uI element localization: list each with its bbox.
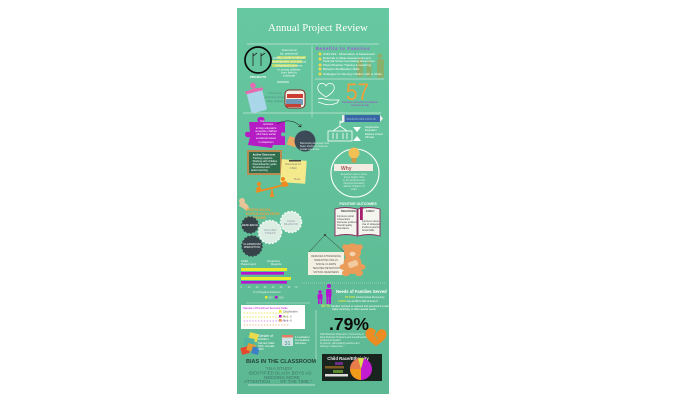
puzzle text: services [263, 122, 274, 126]
projects description: a decade [283, 74, 295, 78]
statistic description: Child Behavior Referrals in Community of [320, 333, 364, 336]
gears [242, 212, 302, 256]
big statistic .79%: .79% [329, 314, 369, 334]
panel: needs of families served [318, 284, 394, 311]
hanging sign: SCHOOL READINESS [313, 271, 339, 274]
chalkboard: Incline Classroom [253, 152, 276, 156]
gears: BEHAVIOR [284, 222, 298, 226]
lactation caption: Consultant [295, 338, 310, 342]
open book: Improves social [337, 215, 354, 218]
quote: ATTENTION OF THE TIME." [244, 379, 312, 384]
background panel [237, 8, 389, 394]
icon: baby [239, 198, 249, 211]
panel: child race/ethnicity [322, 354, 382, 381]
axis values [240, 287, 298, 289]
school statistics [353, 125, 383, 141]
lactation caption: 1 Lactation [295, 335, 310, 339]
waffle rows: ★★★★★★★★★★★★★★★★ [243, 323, 289, 327]
icon: hand-drawn circle with 11 [245, 47, 271, 73]
school statistics: Expulsion [365, 128, 377, 132]
axis values: 30 [264, 287, 267, 289]
quote [244, 366, 312, 384]
icon: baby bottle [243, 80, 268, 114]
open book: BEHAVIORAL [341, 210, 357, 213]
bottle caption: parenting groups [265, 95, 286, 99]
open book: Involves parents [362, 226, 380, 229]
chalkboard: · Structured and [251, 165, 270, 169]
hanging sign [308, 234, 344, 275]
projects label: PROJECTS [250, 75, 266, 79]
waffle rows: ★★★★★★★★★★★★★★★★ [243, 315, 289, 319]
projects description [272, 48, 307, 78]
statistics: 10 % Families reported or received and assessed in preferred, [321, 303, 394, 308]
waffle rows [243, 311, 289, 327]
icon: pencil banner: SCHOOLING FOCUS [346, 117, 376, 121]
icon: pencil banner [342, 115, 383, 122]
open book [335, 207, 381, 236]
blocks caption: Gender of [258, 334, 273, 338]
survey table panel [241, 305, 305, 329]
panel: why circle [331, 148, 379, 197]
blocks caption: 64%, Female [258, 344, 275, 348]
bias in the classroom heading: BIAS IN THE CLASSROOM [246, 359, 316, 365]
why text: K-12 students and [343, 178, 365, 182]
projects description: Year-round [282, 48, 297, 52]
open book: Use of strategies [362, 223, 381, 226]
axis values: 40 [272, 287, 275, 289]
chalkboard [247, 150, 282, 175]
bars [241, 268, 291, 284]
57 caption [342, 100, 379, 107]
why text: color [351, 187, 357, 191]
axis values: 0 [240, 287, 242, 289]
why text: times higher than [344, 175, 365, 179]
blocks caption: 36% [258, 347, 264, 351]
statistic description [320, 333, 369, 348]
panel: child race/ethnicity: Child Race/Ethnicity [327, 356, 369, 361]
panel: puzzle piece [245, 117, 285, 148]
icon: heart in hand [318, 83, 339, 105]
57 caption: Families received consultation [342, 100, 379, 104]
legend: 2018 [278, 298, 284, 300]
statistics: 50.00% income below low poverty [345, 295, 385, 299]
benefits list: Referrals to State Assessments and [323, 56, 371, 60]
panel: dark circle callout: social outcomes [300, 147, 320, 151]
chalkboard: · Parent/teacher goals [251, 162, 277, 166]
chart labels: Concerns [267, 259, 280, 263]
waffle rows: ★★★★★★★★★★★★★★★★ [243, 311, 289, 315]
blocks caption: Children [258, 337, 269, 341]
icon: school building [328, 121, 352, 141]
bar chart: negative behaviors [240, 259, 298, 300]
open book: Social skills [362, 229, 375, 232]
chalkboard: active learning [251, 168, 268, 172]
hanging sign: REDUCES ATTENDANCE [311, 255, 341, 258]
bottle caption [265, 91, 286, 103]
chart labels [241, 259, 282, 266]
icon: backpack [285, 90, 305, 108]
chalkboard: · Training supports [251, 156, 273, 160]
57 caption: services at risk [351, 103, 370, 107]
axis values: 60 [288, 287, 291, 289]
legend [265, 296, 284, 300]
projects description: development, and serious [272, 60, 307, 64]
school statistics: Reduce school [365, 132, 383, 136]
projects description: quality, social emotional [273, 56, 305, 60]
statistic description: training in classrooms [320, 345, 344, 348]
open book: Cooperation [337, 218, 351, 221]
why text: disproportionately [343, 181, 365, 185]
icon: building blocks [240, 332, 260, 355]
why text [341, 172, 368, 191]
panel: preschool expulsion risk measure [239, 198, 302, 256]
school statistics: Climate [365, 135, 375, 139]
icon: broken heart [365, 328, 387, 346]
axis values: 50 [280, 287, 283, 289]
table legend [279, 310, 299, 322]
statistic description: to parents, participating teachers and [320, 342, 360, 345]
blocks caption [258, 334, 275, 351]
gears: RESILIENCE [242, 223, 258, 227]
projects description: by: preschool [280, 52, 298, 56]
projects description: behavioral concerns [276, 64, 303, 68]
arrow [277, 121, 301, 127]
quote: NEEDING MORE [264, 375, 300, 380]
panel: benefits to families [316, 46, 384, 78]
table legend: Pk 6 - 8 [283, 320, 292, 322]
hanging sign: PARENTING SKILLS [314, 259, 338, 262]
axis values: 70 [295, 287, 298, 289]
statistic description: Early Behavior Programs and overall teaching [320, 336, 369, 339]
heading: POSITIVE OUTCOMES [339, 202, 377, 206]
gears: DISRUPTION [244, 245, 260, 249]
chart labels: Parent and [241, 262, 256, 266]
gears: CLASSROOM [243, 242, 261, 246]
waffle rows: ★★★★★★★★★★★★★★★★ [243, 319, 289, 323]
why text: Expulsion rate is three [341, 172, 368, 176]
icon: teddy bear [340, 244, 366, 276]
chalkboard: · Working with children [251, 159, 278, 163]
open book: Decrease problems [337, 221, 359, 224]
survey table panel: Sample of Preschool Services Table [243, 306, 288, 310]
statistics: highly parenting, or other special needs [332, 308, 376, 311]
lactation caption [295, 335, 310, 345]
bottle caption: baby supplies [267, 99, 284, 103]
why banner: Why [341, 166, 352, 172]
heading: MEASURE [246, 215, 266, 220]
panel: dark circle callout [287, 130, 330, 152]
icon: parent and child [318, 284, 332, 304]
heading: PRESCHOOL [246, 207, 272, 212]
panel: projects count [245, 47, 307, 82]
lactation caption: Advocates [295, 342, 307, 345]
quote: IDENTIFIED BLACK BOYS AS [248, 370, 312, 376]
title: Annual Project Review [268, 22, 368, 34]
open book: Attendance [337, 227, 350, 230]
sticky note: Child [290, 166, 297, 170]
puzzle text: recognize children [255, 129, 277, 133]
blocks caption: Served: Male [258, 341, 275, 345]
statistic description: provided to families [320, 339, 341, 342]
benefits list: Child Visit · Observation & Assessment [323, 52, 375, 56]
sticky note: Removal of [285, 162, 301, 166]
icon: light bulb [348, 148, 360, 162]
puzzle text [255, 119, 277, 144]
legend: 2017 [268, 298, 274, 300]
puzzle text: who have social [256, 132, 276, 136]
school statistics: Suspension [365, 125, 380, 129]
pie chart [350, 358, 372, 380]
panel: dark circle callout: Removal prevention has [300, 141, 330, 145]
statistics: 0.60% live at 200 to 300 of level of [338, 299, 378, 303]
bottle caption: Community [268, 91, 282, 95]
quote: "IN A STUDY [266, 366, 292, 371]
gears: STRESS [265, 231, 276, 235]
heading [246, 207, 280, 220]
table legend: Child/families [283, 310, 299, 314]
icon: calendar: 31 [284, 341, 291, 347]
puzzle text: Our [260, 119, 264, 123]
benefits list [318, 52, 382, 76]
benefits list: Parental Stress Counseling Resources [323, 59, 375, 63]
projects description: from birth to [281, 70, 297, 74]
heading: EXPULSION RISK [246, 211, 280, 216]
why text: affects children of [343, 184, 365, 188]
puzzle text: in classroom [258, 140, 274, 144]
benefits heading: Benefits to Families [316, 46, 370, 51]
legend bars [325, 362, 348, 376]
gears: CHILD [287, 219, 295, 223]
table legend: Pk 0 - 5 [283, 316, 292, 318]
axis values: 10 [248, 287, 251, 289]
family silhouette icon [357, 54, 384, 78]
open book: Overall quality [337, 224, 353, 227]
puzzle text: emotional issues [256, 136, 277, 140]
statistics [321, 295, 394, 311]
sticky note [280, 159, 307, 184]
benefits list: Strategies for Serving Children with or Risks [323, 72, 382, 76]
icon: seesaw [256, 177, 289, 197]
gears: TEACHER [264, 228, 276, 232]
benefits list: Parent/Teacher Training & Coaching [323, 63, 372, 67]
hanging sign: TEACHER RETENTION [312, 267, 340, 270]
chart labels: Child [241, 259, 248, 263]
icon: calendar [282, 335, 293, 347]
axis title: % of Negative Behaviors [253, 291, 281, 294]
puzzle text: to help educators [256, 126, 277, 130]
open book: FAMILY [366, 210, 375, 213]
hanging sign: SOCIAL CLIMATE [316, 263, 337, 266]
panel: positive outcomes [308, 202, 381, 276]
projects description: in young children [278, 68, 301, 72]
open book: Improves stress [362, 220, 380, 223]
panel: dark circle callout: been shown to improve [300, 144, 328, 148]
heading: Needs of Families Served [336, 289, 387, 294]
chart labels: Reports [271, 262, 282, 266]
axis values: 20 [256, 287, 259, 289]
benefits list: Behavior Modification Skills [323, 67, 360, 71]
sticky note: Time [294, 177, 301, 181]
big number 57: 57 [346, 79, 369, 106]
